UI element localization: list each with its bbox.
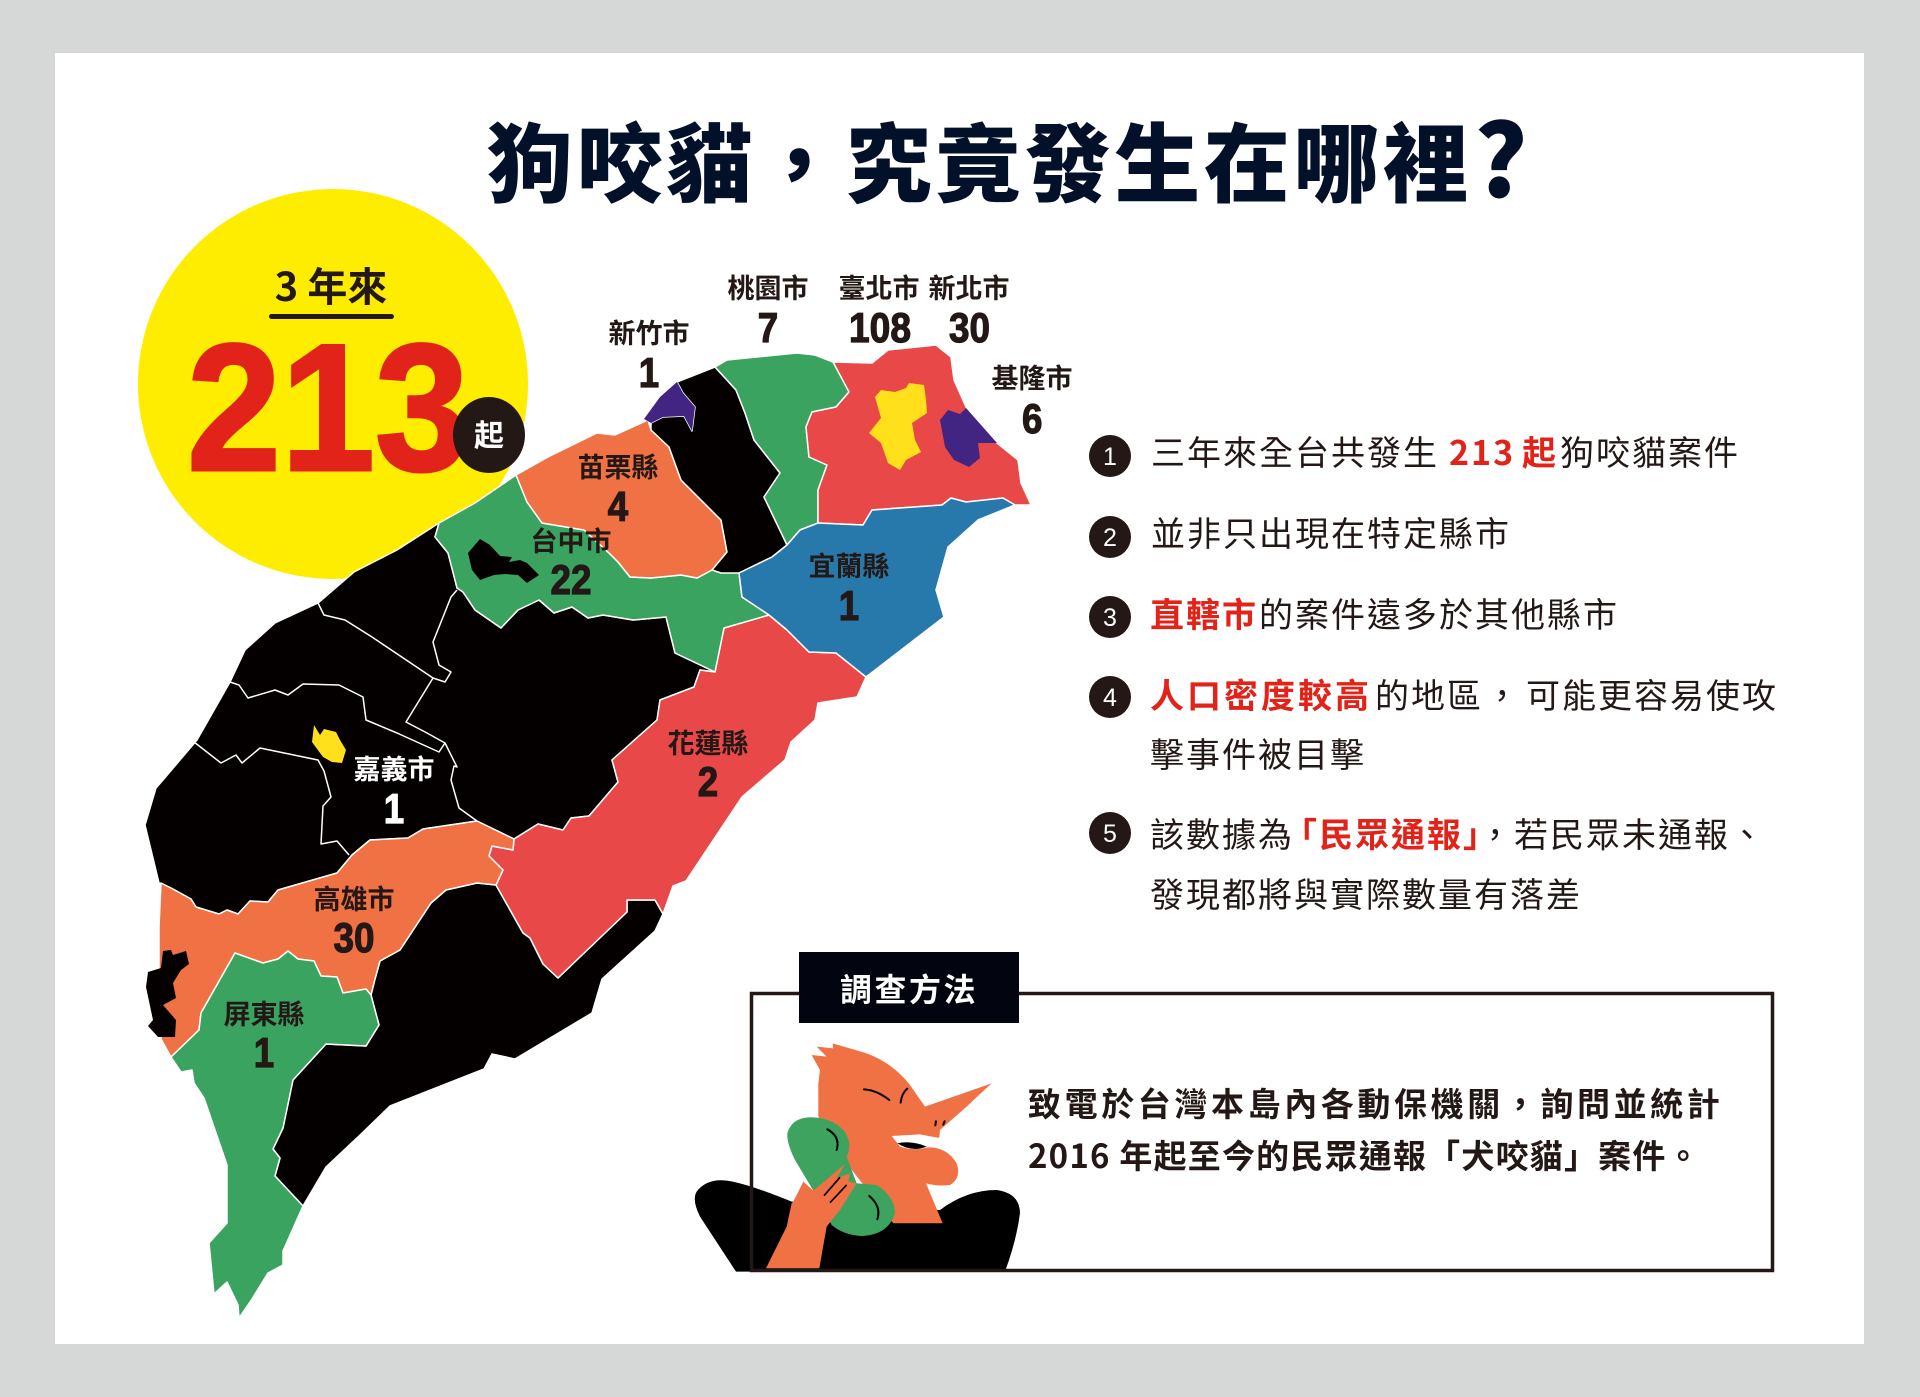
region: Hsinchu County	[651, 367, 787, 573]
label: 臺北市 108: 臺北市	[838, 267, 920, 306]
point 1: 起	[1522, 426, 1558, 475]
label: 新竹市 1: 新竹市	[608, 312, 690, 351]
key point list	[1089, 426, 1778, 917]
point 5: ，	[1478, 808, 1514, 857]
point 1: 213	[1449, 426, 1515, 475]
point 2: 並非只出現在特定縣市	[1151, 507, 1511, 556]
region: Taichung	[435, 475, 769, 672]
mouth interior	[897, 1142, 927, 1149]
subheading: 3 years: 3 年來	[275, 255, 387, 313]
eye and nose marks	[864, 1089, 945, 1125]
label: 新北市 30: 30	[949, 304, 990, 351]
label: 基隆市 6: 基隆市	[992, 357, 1072, 396]
method tag: 調查方法	[840, 965, 978, 1011]
point 1: 1	[1103, 443, 1117, 471]
region: Pingtung	[171, 951, 379, 1318]
label: 嘉義市 1	[354, 748, 434, 832]
label: 高雄市 30: 高雄市	[314, 878, 394, 917]
point 5: 發現都將與實際數量有落差	[1150, 868, 1582, 917]
label: 新竹市 1	[608, 312, 690, 396]
label: 台中市 22: 22	[550, 556, 592, 603]
region: Miaoli	[516, 420, 727, 578]
point 3: 直轄市	[1150, 588, 1258, 637]
label: 臺北市 108: 108	[849, 304, 911, 351]
point 2: 2	[1103, 524, 1117, 552]
illustration: man on phone	[766, 1043, 992, 1268]
mouth	[892, 1134, 941, 1149]
region: Keelung	[940, 408, 997, 467]
unit badge	[453, 397, 525, 473]
label: 苗栗縣 4: 4	[608, 483, 629, 530]
region: Hualien	[489, 615, 866, 978]
label: 新竹市 1: 1	[639, 349, 659, 396]
method description: 致電於台灣本島內各動保機關，詢問並統計	[1028, 1078, 1723, 1126]
map of Taiwan	[145, 345, 1031, 1318]
label: 嘉義市 1: 嘉義市	[354, 748, 434, 787]
region: black coastal patch	[146, 950, 189, 1037]
method tag	[799, 952, 1019, 1023]
point 5: 若民眾未通報、	[1514, 808, 1766, 857]
method description	[1028, 1078, 1723, 1178]
point 4	[1089, 669, 1778, 777]
region: Kaohsiung	[159, 821, 514, 1057]
label: 苗栗縣 4: 苗栗縣	[578, 446, 658, 485]
point 1: 狗咬貓案件	[1560, 426, 1740, 475]
point 1: 三年來全台共發生	[1151, 426, 1439, 475]
method box frame	[752, 994, 1772, 1270]
label: 宜蘭縣 1: 宜蘭縣	[808, 545, 890, 584]
point 5	[1089, 808, 1766, 917]
label: 宜蘭縣 1: 1	[839, 582, 859, 629]
label: 桃園市 7: 桃園市	[728, 267, 808, 306]
point 4: 4	[1103, 684, 1117, 712]
label: 台中市 22	[530, 520, 612, 603]
label: 花蓮縣 2	[668, 722, 748, 805]
point 3: 3	[1103, 604, 1117, 632]
label: 新北市 30	[928, 267, 1010, 351]
head	[812, 1043, 992, 1223]
region: western black counties	[145, 523, 715, 914]
point 3: 的案件遠多於其他縣市	[1259, 588, 1619, 637]
point 4: 可能更容易使攻	[1526, 669, 1778, 718]
point 5: 5	[1103, 820, 1117, 848]
region: Taoyuan	[715, 353, 849, 545]
point 4: 的地區	[1375, 669, 1483, 718]
county borders	[194, 590, 477, 855]
region: Taichung black enclave	[468, 539, 539, 583]
label: 苗栗縣 4	[578, 446, 658, 530]
region: Taipei City	[869, 383, 927, 470]
label: 花蓮縣 2: 花蓮縣	[668, 722, 748, 761]
region: Chiayi City	[312, 725, 346, 763]
point 3	[1089, 588, 1619, 638]
label: 嘉義市 1: 1	[384, 785, 404, 832]
point 1	[1089, 426, 1740, 477]
telephone handset	[787, 1117, 895, 1236]
region: New Taipei	[806, 345, 1031, 525]
point 5: 該數據為	[1150, 808, 1294, 857]
label: 基隆市 6: 6	[1022, 395, 1042, 442]
region: Taitung black	[273, 883, 663, 1206]
label: 花蓮縣 2: 2	[698, 758, 718, 805]
big number 213: 213	[187, 307, 469, 509]
label: 桃園市 7	[728, 267, 808, 351]
label: 桃園市 7: 7	[758, 304, 778, 351]
label: 臺北市 108	[838, 267, 920, 351]
label: 台中市 22: 台中市	[530, 520, 612, 559]
label: 宜蘭縣 1	[808, 545, 890, 629]
title: ?	[1474, 81, 1531, 226]
point 4: 人口密度較高	[1150, 669, 1372, 718]
unit badge: 起	[474, 411, 504, 455]
region: Yilan	[739, 498, 1015, 677]
label: 高雄市 30: 30	[334, 914, 374, 961]
title: 狗咬貓，究竟發生在哪裡	[487, 95, 1473, 220]
method description: 2016 年起至今的民眾通報「犬咬貓」案件。	[1028, 1130, 1701, 1178]
label: 新北市 30: 新北市	[928, 267, 1010, 306]
point 4: 擊事件被目擊	[1150, 728, 1366, 777]
yellow circle: total count	[138, 189, 528, 579]
hand	[766, 1164, 857, 1268]
label: 屏東縣 1: 1	[254, 1029, 274, 1076]
label: 基隆市 6	[992, 357, 1072, 442]
point 4: ，	[1485, 669, 1521, 718]
region: Hsinchu City	[644, 382, 695, 431]
label: 高雄市 30	[314, 878, 394, 961]
illustration: shoulders	[695, 1180, 1020, 1272]
underline	[269, 314, 394, 319]
point 5: 「民眾通報」	[1283, 808, 1499, 857]
label: 屏東縣 1: 屏東縣	[224, 993, 304, 1032]
label: 屏東縣 1	[224, 993, 304, 1076]
